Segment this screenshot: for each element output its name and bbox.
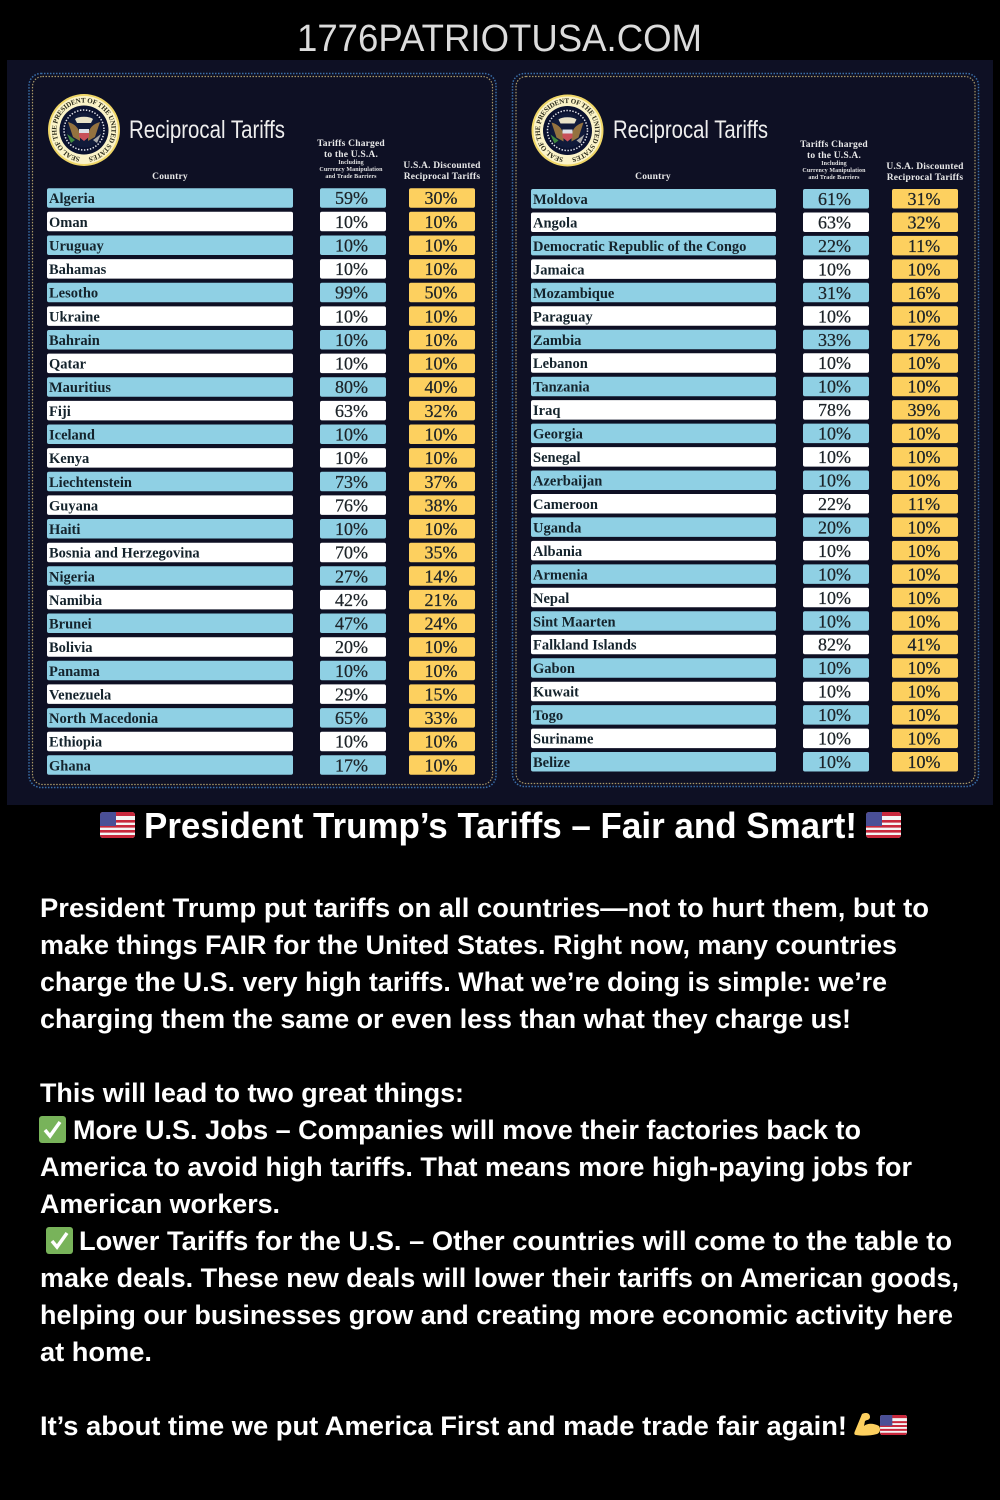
rows: right country list: Kuwait — [533, 685, 579, 701]
rows: left country list: 10% — [424, 236, 458, 256]
rows: right country list: 17% — [908, 330, 940, 350]
rows: right country list: 10% — [908, 306, 940, 326]
rows: left country list: 10% — [424, 330, 458, 350]
icon: check mark two — [46, 1227, 73, 1254]
rows: left country list: 10% — [335, 424, 368, 444]
icon: presidential seal — [532, 94, 604, 166]
column heading: tariffs charged — [317, 139, 385, 180]
rows: right country list: 10% — [818, 564, 851, 584]
column heading: country: Country — [152, 172, 188, 182]
heading: President Trump’s Tariffs – Fair and Smart! — [144, 805, 857, 846]
rows: right country list: Georgia — [533, 427, 584, 443]
rows: right country list: Paraguay — [533, 309, 593, 325]
rows: left country list: 76% — [335, 495, 368, 515]
rows: right country list — [531, 189, 958, 772]
table title: Reciprocal Tariffs — [613, 116, 768, 144]
rows: left country list: 10% — [335, 661, 368, 681]
column heading: discounted tariffs: U.S.A. Discounted — [403, 161, 481, 171]
text block: two great things: This will lead to two great things: — [40, 1078, 464, 1108]
icon: US flag end — [880, 1415, 907, 1435]
rows: left country list: 10% — [335, 448, 368, 468]
rows: left country list: 21% — [424, 590, 458, 610]
rows: left country list: 30% — [424, 188, 458, 208]
rows: right country list: 32% — [908, 212, 940, 232]
text block: two great things: at home. — [40, 1337, 152, 1367]
rows: right country list: 10% — [818, 682, 851, 702]
rows: left country list: 29% — [335, 684, 368, 704]
table title: Reciprocal Tariffs — [129, 116, 285, 144]
rows: left country list: 80% — [335, 377, 368, 397]
rows: left country list: 27% — [335, 566, 368, 586]
column heading: tariffs charged: Currency Manipulation — [802, 168, 866, 174]
rows: left country list: 40% — [424, 377, 458, 397]
rows: right country list: Sint Maarten — [533, 614, 616, 630]
column heading: discounted tariffs — [403, 161, 481, 182]
column heading: tariffs charged: and Trade Barriers — [325, 174, 377, 180]
rows: right country list: Mozambique — [533, 286, 615, 302]
rows: right country list: Suriname — [533, 732, 594, 748]
rows: right country list: 10% — [818, 541, 851, 561]
rows: left country list: 37% — [424, 472, 458, 492]
rows: right country list: 10% — [908, 658, 940, 678]
rows: right country list: 10% — [818, 588, 851, 608]
rows: left country list: 10% — [335, 259, 368, 279]
rows: right country list: 78% — [818, 400, 851, 420]
column heading: tariffs charged — [800, 140, 868, 181]
text block: introduction: charge the U.S. very high tariffs. What we’re doing is simple: we’re — [40, 967, 887, 997]
rows: left country list: 10% — [424, 212, 458, 232]
rows: left country list: 10% — [335, 330, 368, 350]
rows: left country list: 10% — [424, 448, 458, 468]
rows: left country list: 10% — [424, 732, 458, 752]
text block: two great things: America to avoid high tariffs. That means more high-paying jobs for — [40, 1152, 912, 1182]
rows: right country list: 10% — [818, 424, 851, 444]
rows: right country list: 10% — [818, 377, 851, 397]
rows: left country list: Guyana — [49, 498, 99, 514]
column heading: discounted tariffs: U.S.A. Discounted — [886, 162, 964, 172]
rows: right country list: 10% — [908, 424, 940, 444]
column heading: country: Country — [635, 172, 671, 182]
rows: right country list: Falkland Islands — [533, 638, 637, 654]
rows: right country list: 10% — [818, 752, 851, 772]
rows: right country list: 10% — [908, 564, 940, 584]
rows: left country list: 70% — [335, 543, 368, 563]
icon: presidential seal — [48, 94, 120, 166]
panel: right tariff table — [512, 74, 978, 786]
rows: left country list: Nigeria — [49, 569, 96, 585]
rows: right country list: Uganda — [533, 520, 582, 536]
rows: right country list: 41% — [908, 635, 940, 655]
text block: two great things: make deals. These new deals will lower their tariffs on American goods, — [40, 1263, 959, 1293]
rows: right country list: 20% — [818, 517, 851, 537]
rows: left country list: 50% — [424, 283, 458, 303]
text block: introduction: President Trump put tariffs on all countries—not to hurt them, but to — [40, 893, 929, 923]
panel: left tariff table — [29, 74, 496, 788]
rows: left country list: Qatar — [49, 357, 87, 373]
rows: left country list: Namibia — [49, 593, 103, 609]
rows: right country list: Iraq — [533, 403, 560, 419]
rows: left country list — [47, 188, 475, 775]
rows: right country list: 10% — [818, 447, 851, 467]
rows: left country list: 10% — [424, 661, 458, 681]
rows: left country list: Brunei — [49, 616, 92, 632]
rows: right country list: 16% — [908, 283, 940, 303]
rows: right country list: Cameroon — [533, 497, 598, 513]
column heading: tariffs charged: Tariffs Charged — [800, 140, 868, 150]
rows: right country list: 10% — [908, 588, 940, 608]
rows: left country list: 35% — [424, 543, 458, 563]
column heading: tariffs charged: Including — [821, 161, 847, 167]
rows: right country list: Nepal — [533, 591, 569, 607]
rows: left country list: Liechtenstein — [49, 475, 132, 491]
rows: left country list: 10% — [424, 354, 458, 374]
rows: left country list: 33% — [424, 708, 458, 728]
rows: left country list: Ghana — [49, 758, 92, 774]
rows: right country list: Lebanon — [533, 356, 588, 372]
rows: left country list: 42% — [335, 590, 368, 610]
rows: right country list: 10% — [908, 752, 940, 772]
rows: left country list: 59% — [335, 188, 368, 208]
rows: right country list: 10% — [908, 611, 940, 631]
rows: right country list: Tanzania — [533, 380, 590, 396]
rows: right country list: 10% — [818, 611, 851, 631]
column heading: discounted tariffs: Reciprocal Tariffs — [404, 172, 480, 182]
rows: left country list: Ukraine — [49, 309, 100, 325]
text block: introduction: make things FAIR for the United States. Right now, many countries — [40, 930, 897, 960]
column heading: discounted tariffs: Reciprocal Tariffs — [887, 173, 963, 183]
rows: left country list: Lesotho — [49, 286, 98, 302]
rows: left country list: Haiti — [49, 522, 80, 538]
rows: right country list: 33% — [818, 330, 851, 350]
icon: US flag right — [866, 812, 901, 838]
rows: right country list: 10% — [818, 705, 851, 725]
rows: right country list: 10% — [908, 541, 940, 561]
rows: right country list: Togo — [533, 708, 563, 724]
rows: left country list: 15% — [424, 684, 458, 704]
tariff table image — [7, 60, 993, 805]
column heading: tariffs charged: Currency Manipulation — [319, 167, 383, 173]
rows: right country list: 10% — [908, 517, 940, 537]
rows: left country list: 99% — [335, 283, 368, 303]
rows: left country list: 10% — [424, 306, 458, 326]
text block: two great things: American workers. — [40, 1189, 280, 1219]
rows: left country list: Bahrain — [49, 333, 100, 349]
rows: left country list: Ethiopia — [49, 735, 103, 751]
rows: right country list: 39% — [908, 400, 940, 420]
rows: right country list: 10% — [908, 705, 940, 725]
rows: right country list: 10% — [818, 259, 851, 279]
rows: right country list: 10% — [908, 729, 940, 749]
rows: right country list: 31% — [818, 283, 851, 303]
rows: left country list: 47% — [335, 614, 368, 634]
rows: right country list: 22% — [818, 494, 851, 514]
rows: left country list: 14% — [424, 566, 458, 586]
rows: left country list: Venezuela — [49, 687, 112, 703]
rows: left country list: 10% — [335, 354, 368, 374]
rows: left country list: 73% — [335, 472, 368, 492]
rows: left country list: Bolivia — [49, 640, 93, 656]
rows: right country list: 61% — [818, 189, 851, 209]
rows: left country list: Panama — [49, 664, 100, 680]
rows: right country list: 10% — [908, 353, 940, 373]
rows: right country list: Belize — [533, 755, 571, 771]
rows: left country list: 10% — [424, 259, 458, 279]
column heading: tariffs charged: Including — [338, 160, 364, 166]
rows: left country list: Uruguay — [49, 238, 105, 254]
rows: left country list: Algeria — [49, 191, 96, 207]
icon: flexed biceps — [854, 1413, 880, 1436]
rows: left country list: 10% — [424, 519, 458, 539]
rows: right country list: Moldova — [533, 192, 589, 208]
rows: left country list: North Macedonia — [49, 711, 159, 727]
icon: US flag left — [100, 812, 135, 838]
rows: right country list: 10% — [908, 447, 940, 467]
rows: left country list: Iceland — [49, 428, 95, 444]
text block: two great things: helping our businesses grow and creating more economic activity here — [40, 1300, 953, 1330]
column heading: discounted tariffs — [886, 162, 964, 183]
rows: left country list: 10% — [424, 424, 458, 444]
text block: introduction: charging them the same or even less than what they charge us! — [40, 1004, 851, 1034]
rows: left country list: 10% — [424, 637, 458, 657]
rows: left country list: 17% — [335, 755, 368, 775]
rows: right country list: 11% — [908, 494, 940, 514]
text block: introduction — [40, 893, 929, 1034]
rows: left country list: 63% — [335, 401, 368, 421]
text block: two great things: More U.S. Jobs – Companies will move their factories back to — [73, 1115, 861, 1145]
rows: right country list: 10% — [908, 682, 940, 702]
rows: left country list: Fiji — [49, 404, 71, 420]
rows: right country list: 10% — [818, 470, 851, 490]
rows: left country list: 10% — [335, 212, 368, 232]
text block: two great things: Lower Tariffs for the U.S. – Other countries will come to the table to — [79, 1226, 952, 1256]
rows: left country list: 10% — [335, 732, 368, 752]
column heading: tariffs charged: and Trade Barriers — [808, 175, 860, 181]
rows: left country list: 10% — [335, 519, 368, 539]
rows: right country list: Gabon — [533, 661, 575, 677]
rows: right country list: Jamaica — [533, 262, 585, 278]
rows: left country list: Oman — [49, 215, 88, 231]
rows: right country list: Armenia — [533, 567, 589, 583]
rows: right country list: Azerbaijan — [533, 474, 602, 490]
rows: left country list: Bosnia and Herzegovina — [49, 546, 200, 562]
rows: left country list: 65% — [335, 708, 368, 728]
rows: right country list: 10% — [908, 377, 940, 397]
rows: right country list: 11% — [908, 236, 940, 256]
rows: left country list: Mauritius — [49, 380, 111, 396]
rows: right country list: 10% — [818, 353, 851, 373]
column heading: tariffs charged: to the U.S.A. — [324, 150, 378, 160]
rows: right country list: 22% — [818, 236, 851, 256]
rows: right country list: Zambia — [533, 333, 582, 349]
rows: right country list: 63% — [818, 212, 851, 232]
rows: right country list: 82% — [818, 635, 851, 655]
rows: right country list: 31% — [908, 189, 940, 209]
rows: right country list: Democratic Republic of the Congo — [533, 239, 746, 255]
text block: closing line: It’s about time we put America First and made trade fair again! — [40, 1411, 847, 1441]
rows: left country list: Kenya — [49, 451, 90, 467]
rows: left country list: 10% — [424, 755, 458, 775]
rows: right country list: 10% — [908, 470, 940, 490]
rows: right country list: Albania — [533, 544, 583, 560]
rows: right country list: 10% — [818, 729, 851, 749]
rows: right country list: 10% — [908, 259, 940, 279]
rows: right country list: 10% — [818, 306, 851, 326]
site header: 1776PATRIOTUSA.COM — [297, 18, 702, 60]
column heading: tariffs charged: Tariffs Charged — [317, 139, 385, 149]
icon: check mark one — [39, 1116, 66, 1143]
text block: two great things — [39, 1078, 959, 1367]
rows: right country list: Senegal — [533, 450, 581, 466]
rows: left country list: 24% — [424, 614, 458, 634]
rows: left country list: Bahamas — [49, 262, 107, 278]
rows: left country list: 38% — [424, 495, 458, 515]
rows: left country list: 10% — [335, 236, 368, 256]
rows: right country list: Angola — [533, 216, 578, 232]
rows: right country list: 10% — [818, 658, 851, 678]
rows: left country list: 32% — [424, 401, 458, 421]
rows: left country list: 10% — [335, 306, 368, 326]
rows: left country list: 20% — [335, 637, 368, 657]
column heading: tariffs charged: to the U.S.A. — [807, 151, 861, 161]
